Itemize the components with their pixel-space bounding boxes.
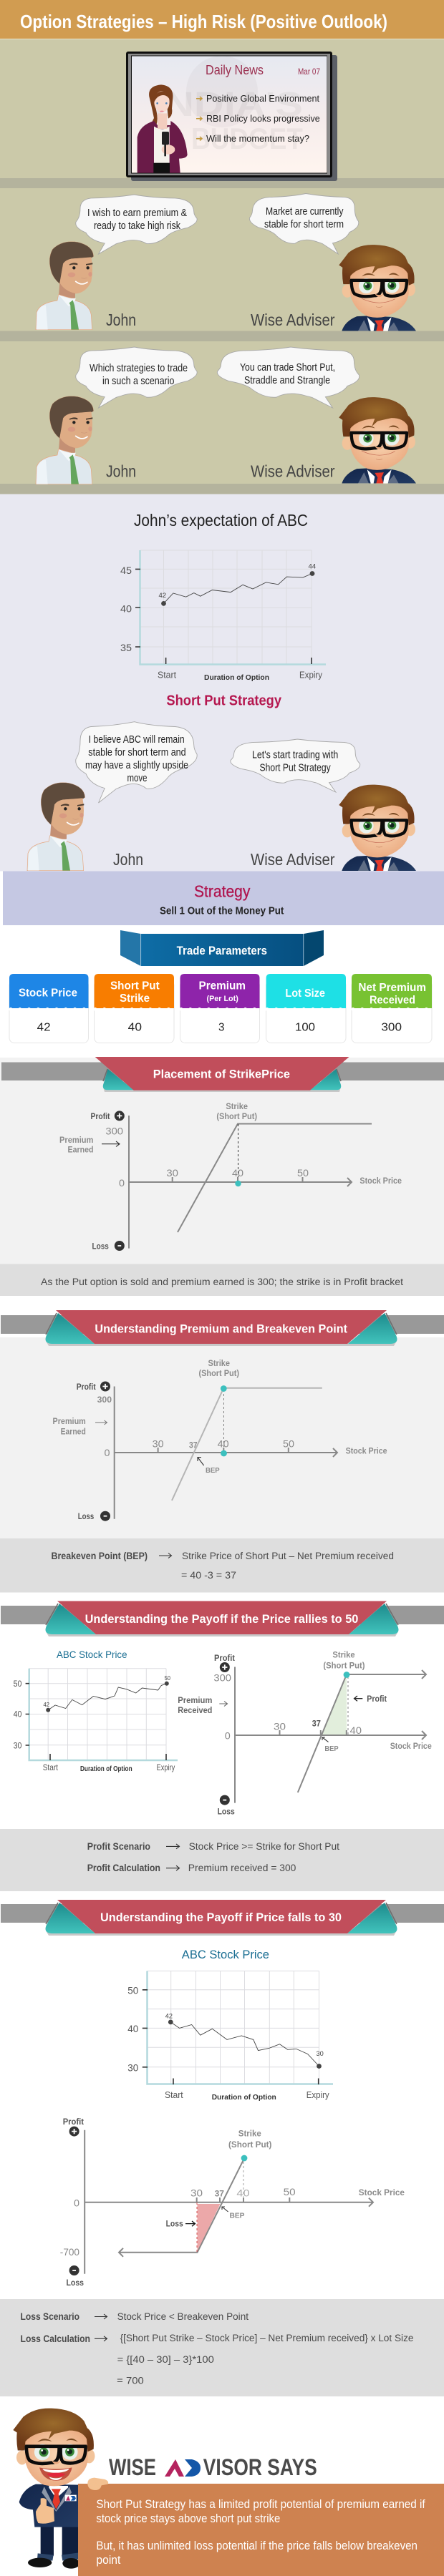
ribbon: Premium and Breakeven (46, 1310, 397, 1346)
news bullet list: RBI Policy looks progressive (206, 114, 320, 124)
news bullet list: Will the momentum stay? (206, 134, 309, 144)
card: Stock Price: 42 (37, 1022, 51, 1034)
panel: daily news TV: BUDGET (191, 122, 303, 155)
payoff chart: breakeven: Strike (208, 1360, 230, 1368)
panel: Payoff if price falls to 30 (0, 1900, 444, 2396)
payoff chart: breakeven: Premium (53, 1418, 86, 1426)
name: John: John (106, 462, 136, 481)
payoff chart: profit at 50: Received (178, 1707, 212, 1715)
explanation: placement: As the Put option is sold and premium earned is 300; the strike is in Profit bracket (41, 1277, 403, 1287)
speech bubble: Wise Adviser: Market are currently (266, 206, 344, 218)
speech bubble: John: ready to take high risk (94, 220, 181, 232)
line chart: price rallies to 50 (14, 1669, 178, 1773)
name: John: John (113, 850, 143, 869)
payoff chart: breakeven: 37 (189, 1442, 198, 1450)
payoff chart: loss at 30: 0 (74, 2198, 79, 2208)
card: Net Premium Received: Net Premium (358, 982, 426, 994)
line chart: price falls to 30: Expiry (307, 2089, 329, 2100)
heading: Wise Advisor says: WISE (109, 2454, 156, 2480)
line chart: price falls to 30: 42 (165, 2012, 173, 2021)
line chart: expectation of ABC: Start (158, 670, 177, 680)
card: Stock Price (9, 974, 89, 1043)
callout: advisor conclusion: stock price stays above short put strike (96, 2512, 280, 2525)
payoff chart: profit at 50: Stock Price (390, 1742, 432, 1751)
payoff chart: breakeven: Earned (61, 1428, 86, 1437)
panel: conversation background (0, 39, 444, 494)
explanation: breakeven formula: = 40 -3 = 37 (181, 1570, 236, 1581)
payoff chart: strike placement: 30 (166, 1168, 178, 1179)
payoff chart: breakeven: 300 (97, 1396, 112, 1405)
payoff chart: profit at 50: Loss (218, 1808, 235, 1817)
name: Wise Adviser: Wise Adviser (251, 850, 335, 869)
news headline: Daily News (206, 63, 264, 77)
payoff chart: profit at 50: Profit (214, 1654, 235, 1663)
payoff chart: profit at 50: 30 (274, 1721, 286, 1732)
payoff chart: strike placement: Stock Price (359, 1177, 402, 1186)
panel: Payoff if the price rallies to 50 (0, 1601, 444, 1891)
character: John (36, 396, 94, 484)
name: Wise Adviser: Wise Adviser (251, 462, 335, 481)
payoff chart: breakeven: 0 (105, 1448, 110, 1458)
line chart: price falls to 30 (127, 1971, 333, 2102)
speech bubble: Wise Adviser: Let's start trading with (252, 750, 338, 761)
character: John (36, 242, 94, 330)
card: Lot Size: Lot Size (285, 987, 325, 1000)
payoff chart: loss at 30: -700 (60, 2247, 79, 2258)
panel: conversation 2 (36, 347, 416, 484)
ribbon: Premium and Breakeven: Understanding Premium and Breakeven Point (95, 1322, 347, 1335)
payoff chart: profit at 50: 37 (312, 1720, 321, 1729)
line chart: price rallies to 50: 40 (14, 1709, 22, 1719)
payoff chart: strike placement: Profit (90, 1113, 110, 1121)
payoff chart: loss at 30: Loss (66, 2279, 84, 2288)
card: Premium per lot: 3 (218, 1022, 225, 1034)
card: Premium per lot (180, 974, 259, 1043)
line chart: expectation of ABC: 44 (308, 562, 316, 570)
payoff chart: loss at 30: Loss (166, 2220, 183, 2229)
speech bubble: Wise Adviser: Short Put Strategy (259, 763, 331, 774)
explanation: profit scenario (0, 1829, 444, 1891)
panel: Understanding Premium and Breakeven Point (0, 1310, 444, 1593)
character: John (27, 783, 85, 871)
payoff chart: loss at 30 (60, 2118, 405, 2288)
payoff chart: profit at 50: Premium (178, 1697, 212, 1705)
line chart: expectation of ABC: 35 (120, 642, 132, 653)
speech bubble: John: I believe ABC will remain (89, 734, 185, 746)
line chart: expectation of ABC: 45 (120, 565, 132, 576)
line chart: price rallies to 50: 50 (165, 1675, 171, 1682)
card: Short Put Strike: Short Put (110, 980, 160, 992)
explanation: breakeven formula: Strike Price of Short Put – Net Premium received (182, 1551, 394, 1561)
line chart: price falls to 30: Start (165, 2089, 183, 2100)
card: Stock Price: Stock Price (19, 987, 77, 1000)
payoff chart: profit at 50: (Short Put) (323, 1662, 365, 1671)
payoff chart: profit at 50 (178, 1652, 432, 1817)
explanation: loss scenario: Loss Scenario (20, 2311, 79, 2322)
line chart: price rallies to 50: 42 (43, 1702, 50, 1708)
payoff chart: strike placement: 0 (119, 1178, 125, 1189)
panel: strategy band: Sell 1 Out of the Money Put (160, 906, 284, 917)
payoff chart: strike placement: Earned (67, 1146, 93, 1155)
line chart: price rallies to 50: 30 (14, 1740, 22, 1750)
explanation: loss scenario: Stock Price < Breakeven Point (117, 2311, 248, 2322)
ribbon: falls to 30: Understanding the Payoff if Price falls to 30 (100, 1911, 342, 1924)
speech bubble: John (76, 722, 197, 803)
panel: conversation 1 (36, 193, 416, 331)
payoff chart: profit at 50: 300 (213, 1673, 231, 1683)
line chart: price falls to 30: 30 (127, 2062, 139, 2074)
trade parameter cards (9, 974, 432, 1043)
payoff chart: strike placement: 40 (232, 1168, 243, 1179)
payoff chart: strike placement: 50 (297, 1168, 309, 1179)
payoff chart: breakeven: 30 (153, 1438, 164, 1449)
news bullet list: Positive Global Environment (206, 94, 320, 104)
payoff chart: strike placement: 300 (105, 1126, 123, 1137)
explanation: loss scenario (0, 2299, 444, 2396)
speech bubble: Wise Adviser (249, 193, 359, 254)
icon: mascot hand on box (87, 2478, 108, 2490)
speech bubble: John: move (127, 773, 148, 784)
heading ribbon: Trade Parameters (120, 930, 324, 966)
payoff chart: loss at 30: (Short Put) (228, 2141, 272, 2150)
explanation: breakeven formula (0, 1538, 444, 1593)
payoff chart: breakeven: 40 (218, 1438, 229, 1449)
payoff chart: breakeven: Loss (78, 1513, 94, 1521)
payoff chart: breakeven: 50 (283, 1438, 294, 1449)
payoff chart: strike placement: Strike (226, 1103, 248, 1111)
payoff chart: profit at 50: BEP (324, 1745, 339, 1753)
card: Short Put Strike (95, 974, 174, 1043)
heading: Wise Advisor says: VISOR SAYS (203, 2454, 317, 2480)
line chart: expectation of ABC (120, 550, 326, 682)
panel: John's expectation (0, 494, 444, 872)
news anchor (137, 84, 188, 173)
speech bubble: John: I wish to earn premium & (87, 208, 187, 219)
speech bubble: John: in such a scenario (102, 376, 175, 387)
payoff chart: loss at 30: Profit (63, 2118, 84, 2127)
character: Wise Advisor mascot (13, 2409, 95, 2569)
panel: Placement of Strike Price (0, 1057, 444, 1296)
name: Wise Adviser: Wise Adviser (251, 311, 335, 329)
line chart: price rallies to 50: Start (43, 1762, 59, 1772)
card: Premium per lot: (Per Lot) (206, 995, 238, 1003)
ribbon: rallies to 50: Understanding the Payoff if the Price rallies to 50 (85, 1612, 358, 1626)
card: Lot Size (266, 974, 346, 1043)
ribbon: falls to 30 (46, 1900, 397, 1936)
payoff chart: strike placement (59, 1103, 402, 1251)
callout: advisor conclusion (78, 2484, 444, 2576)
heading: ABC Stock Price: ABC Stock Price (182, 1948, 269, 1961)
line chart: price rallies to 50: Expiry (157, 1762, 175, 1772)
card: Net Premium Received: Received (370, 995, 415, 1006)
card: Lot Size: 100 (295, 1022, 315, 1034)
line chart: expectation of ABC: 42 (159, 592, 166, 600)
card: Short Put Strike: Strike (120, 992, 150, 1005)
payoff chart: breakeven: Stock Price (346, 1448, 387, 1456)
line chart: price rallies to 50: 50 (14, 1679, 22, 1689)
speech bubble: Wise Adviser (217, 347, 359, 408)
line chart: expectation of ABC: Expiry (299, 670, 323, 680)
explanation: loss scenario: {[Short Put Strike – Stock Price] – Net Premium received} x Lot Size (120, 2333, 414, 2343)
panel: strategy band (3, 872, 444, 925)
explanation: profit scenario: Premium received = 300 (188, 1863, 296, 1873)
payoff chart: strike placement: (Short Put) (216, 1113, 257, 1121)
ribbon: Placement of StrikePrice (95, 1057, 349, 1092)
explanation: placement (0, 1264, 444, 1296)
payoff chart: loss at 30: 50 (284, 2187, 296, 2197)
news bullet list (196, 94, 320, 144)
panel: strategy band: Strategy (194, 882, 251, 901)
heading: Wise Advisor says (109, 2454, 317, 2480)
explanation: loss scenario: = 700 (117, 2376, 144, 2386)
speech bubble: John (76, 347, 197, 408)
explanation: loss scenario: Loss Calculation (20, 2333, 90, 2344)
heading ribbon: Trade Parameters: Trade Parameters (177, 945, 267, 957)
explanation: profit scenario: Profit Calculation (87, 1863, 160, 1873)
panel: daily news TV: INDIA'S (153, 86, 303, 124)
payoff chart: breakeven (53, 1360, 387, 1521)
explanation: profit scenario: Stock Price >= Strike for Short Put (189, 1841, 339, 1852)
speech bubble: Wise Adviser (231, 739, 360, 792)
payoff chart: breakeven: Profit (77, 1383, 96, 1392)
callout: advisor conclusion: point (96, 2553, 121, 2567)
line chart: price falls to 30: Duration of Option (212, 2093, 276, 2102)
payoff chart: strike placement: Premium (59, 1136, 93, 1145)
heading: Short Put Strategy: Short Put Strategy (166, 693, 282, 709)
payoff chart: breakeven: BEP (206, 1467, 220, 1475)
character: Wise Adviser (339, 245, 416, 331)
explanation: profit scenario: Profit Scenario (87, 1841, 150, 1852)
line chart: expectation of ABC: 40 (120, 603, 132, 615)
speech bubble: Wise Adviser: Straddle and Strangle (244, 375, 330, 386)
panel: daily news TV (126, 52, 337, 181)
speech bubble: Wise Adviser: You can trade Short Put, (240, 362, 335, 374)
card: Premium per lot: Premium (199, 980, 246, 992)
card: Net Premium Received: 300 (381, 1022, 402, 1034)
payoff chart: profit at 50: Profit (367, 1695, 387, 1704)
heading: John's expectation: John’s expectation of ABC (134, 511, 308, 530)
payoff chart: breakeven: (Short Put) (199, 1370, 239, 1378)
payoff chart: loss at 30: BEP (229, 2212, 245, 2220)
payoff chart: profit at 50: Strike (332, 1652, 355, 1660)
card: Net Premium Received (352, 974, 432, 1043)
heading: ABC Stock Price: ABC Stock Price (57, 1649, 127, 1660)
line chart: price rallies to 50: Duration of Option (80, 1765, 132, 1773)
payoff chart: loss at 30: Strike (238, 2130, 261, 2139)
ribbon: rallies to 50 (46, 1601, 398, 1636)
payoff chart: loss at 30: 30 (190, 2188, 203, 2199)
payoff chart: loss at 30: Stock Price (359, 2189, 405, 2197)
title banner: Option Strategies – High Risk (Positive Outlook) (20, 11, 387, 32)
name: John: John (106, 311, 136, 329)
character: Wise Adviser (339, 785, 416, 871)
speech bubble: John: Which strategies to trade (90, 363, 188, 374)
line chart: expectation of ABC: Duration of Option (204, 673, 269, 682)
speech bubble: John: stable for short term and (88, 747, 186, 758)
speech bubble: John (76, 195, 197, 254)
payoff chart: strike placement: Loss (92, 1242, 109, 1251)
panel: Wise Advisor says (13, 2409, 444, 2576)
explanation: loss scenario: = {[40 – 30] – 3}*100 (117, 2354, 214, 2365)
payoff chart: profit at 50: 40 (349, 1725, 362, 1736)
speech bubble: John: may have a slightly upside (85, 760, 188, 771)
line chart: price falls to 30: 50 (127, 1985, 139, 1996)
payoff chart: profit at 50: 0 (225, 1730, 231, 1741)
news date: Mar 07 (298, 67, 320, 77)
line chart: price falls to 30: 40 (127, 2023, 139, 2034)
line chart: price falls to 30: 30 (317, 2050, 324, 2058)
card: Short Put Strike: 40 (128, 1022, 142, 1034)
payoff chart: loss at 30: 37 (215, 2190, 224, 2199)
ribbon: Placement of StrikePrice: Placement of StrikePrice (153, 1068, 290, 1081)
payoff chart: loss at 30: 40 (236, 2188, 250, 2199)
character: Wise Adviser (339, 397, 416, 483)
title banner (0, 0, 444, 39)
speech bubble: Wise Adviser: stable for short term (264, 219, 344, 230)
explanation: breakeven formula: Breakeven Point (BEP) (52, 1551, 148, 1561)
